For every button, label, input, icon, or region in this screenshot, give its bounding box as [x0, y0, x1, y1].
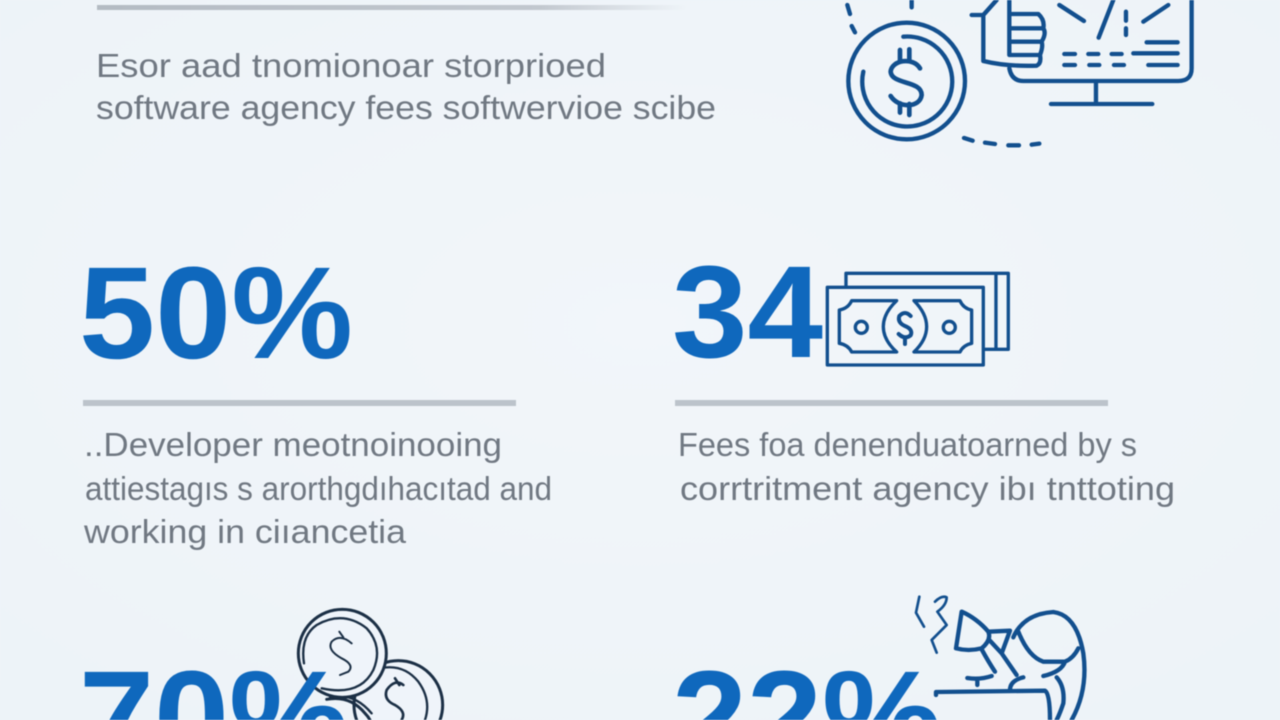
stat number 34: 34 — [672, 238, 823, 385]
intro text: software agency fees softwervioe scibe — [96, 89, 716, 126]
divider — [83, 400, 516, 406]
description: ..Developer meotnoinooing — [84, 426, 502, 463]
icon: banknotes — [827, 273, 1008, 365]
intro text — [96, 47, 716, 126]
description: Fees foa denenduatoarned by s — [678, 426, 1137, 463]
intro text: Esor aad tnomionoar storprioed — [96, 47, 606, 84]
panel: 22% stat — [672, 597, 1084, 720]
description — [678, 426, 1175, 507]
description: attiestagıs s arorthgdıhacıtad and — [85, 470, 552, 507]
icon: monitor with code and hand — [972, 0, 1192, 104]
icon: dollar coin — [847, 0, 1039, 145]
stat number 50%: 50% — [79, 239, 353, 386]
panel: 34 stat — [672, 238, 1175, 507]
icon: coin stack — [298, 609, 443, 720]
panel: 50% stat — [79, 239, 552, 550]
description: working in ciıancetia — [83, 513, 407, 550]
description: corrtritment agency ibı tnttoting — [680, 470, 1175, 507]
icon: stressed person at desk — [916, 597, 1084, 720]
panel: 70% stat — [79, 609, 443, 720]
divider — [675, 400, 1108, 406]
description — [83, 426, 552, 550]
panel: intro — [96, 0, 1192, 145]
